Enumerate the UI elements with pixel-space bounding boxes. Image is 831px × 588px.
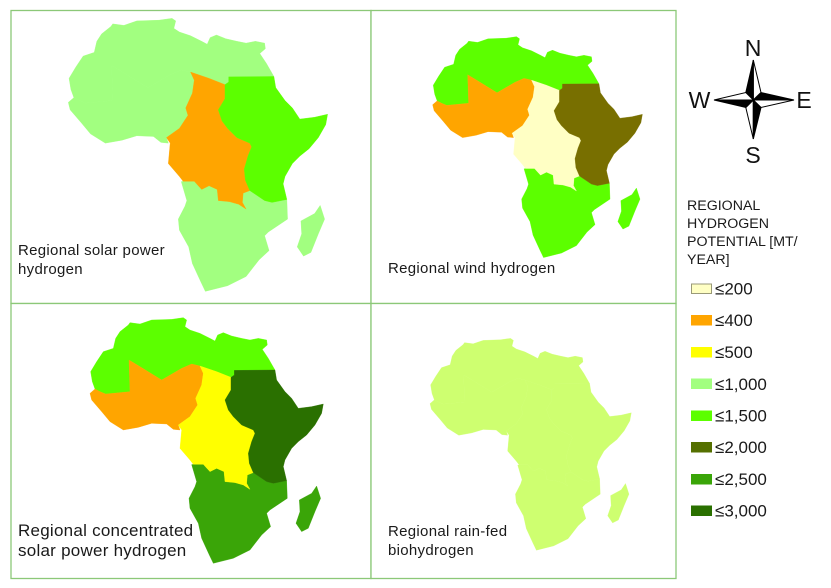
- legend title: HYDROGEN: [687, 216, 769, 232]
- legend title: REGIONAL: [687, 198, 760, 214]
- compass rose: W: [689, 87, 711, 113]
- legend item: up to 400: [691, 311, 753, 330]
- label: solar power hydrogen: Regional solar power: [18, 242, 165, 259]
- label: solar power hydrogen: hydrogen: [18, 261, 83, 278]
- legend item: up to 200: ≤200: [715, 280, 753, 298]
- map: rain-fed biohydrogen: [430, 338, 631, 550]
- legend item: up to 2,500: [691, 470, 767, 489]
- legend item: up to 2,500: ≤2,500: [715, 470, 767, 489]
- map: wind hydrogen: [433, 37, 642, 258]
- legend title: YEAR]: [687, 252, 730, 268]
- label: rain-fed biohydrogen: Regional rain-fed: [388, 523, 507, 540]
- legend item: up to 3,000: [691, 502, 767, 520]
- panel: regional rain-fed biohydrogen: [371, 304, 676, 578]
- label: rain-fed biohydrogen: biohydrogen: [388, 542, 474, 559]
- compass rose: N: [745, 35, 761, 61]
- panel: regional wind hydrogen: [371, 10, 676, 304]
- legend: [687, 198, 798, 520]
- map: solar power hydrogen: [68, 18, 328, 291]
- legend item: up to 1,500: ≤1,500: [715, 406, 767, 426]
- label: concentrated solar power hydrogen: Regional concentrated: [18, 521, 193, 540]
- map: concentrated solar power hydrogen: [90, 318, 323, 563]
- label: wind hydrogen: Regional wind hydrogen: [388, 260, 556, 277]
- compass rose: E: [796, 87, 812, 113]
- legend title: POTENTIAL [MT/: [687, 234, 798, 250]
- legend item: up to 1,000: [691, 375, 767, 394]
- legend item: up to 3,000: ≤3,000: [715, 502, 767, 520]
- legend item: up to 1,000: ≤1,000: [715, 375, 767, 394]
- panel: regional solar power hydrogen: [11, 10, 371, 304]
- legend item: up to 2,000: [691, 438, 767, 457]
- label: concentrated solar power hydrogen: solar power hydrogen: [18, 541, 186, 560]
- legend item: up to 1,500: [691, 406, 767, 426]
- compass rose: [689, 35, 812, 168]
- legend item: up to 200: [692, 280, 753, 298]
- legend item: up to 400: ≤400: [715, 311, 753, 330]
- legend item: up to 2,000: ≤2,000: [715, 438, 767, 457]
- legend item: up to 500: [691, 343, 753, 362]
- compass rose: S: [745, 142, 761, 168]
- panel: regional concentrated solar power hydrogen: [11, 304, 371, 578]
- legend item: up to 500: ≤500: [715, 343, 753, 362]
